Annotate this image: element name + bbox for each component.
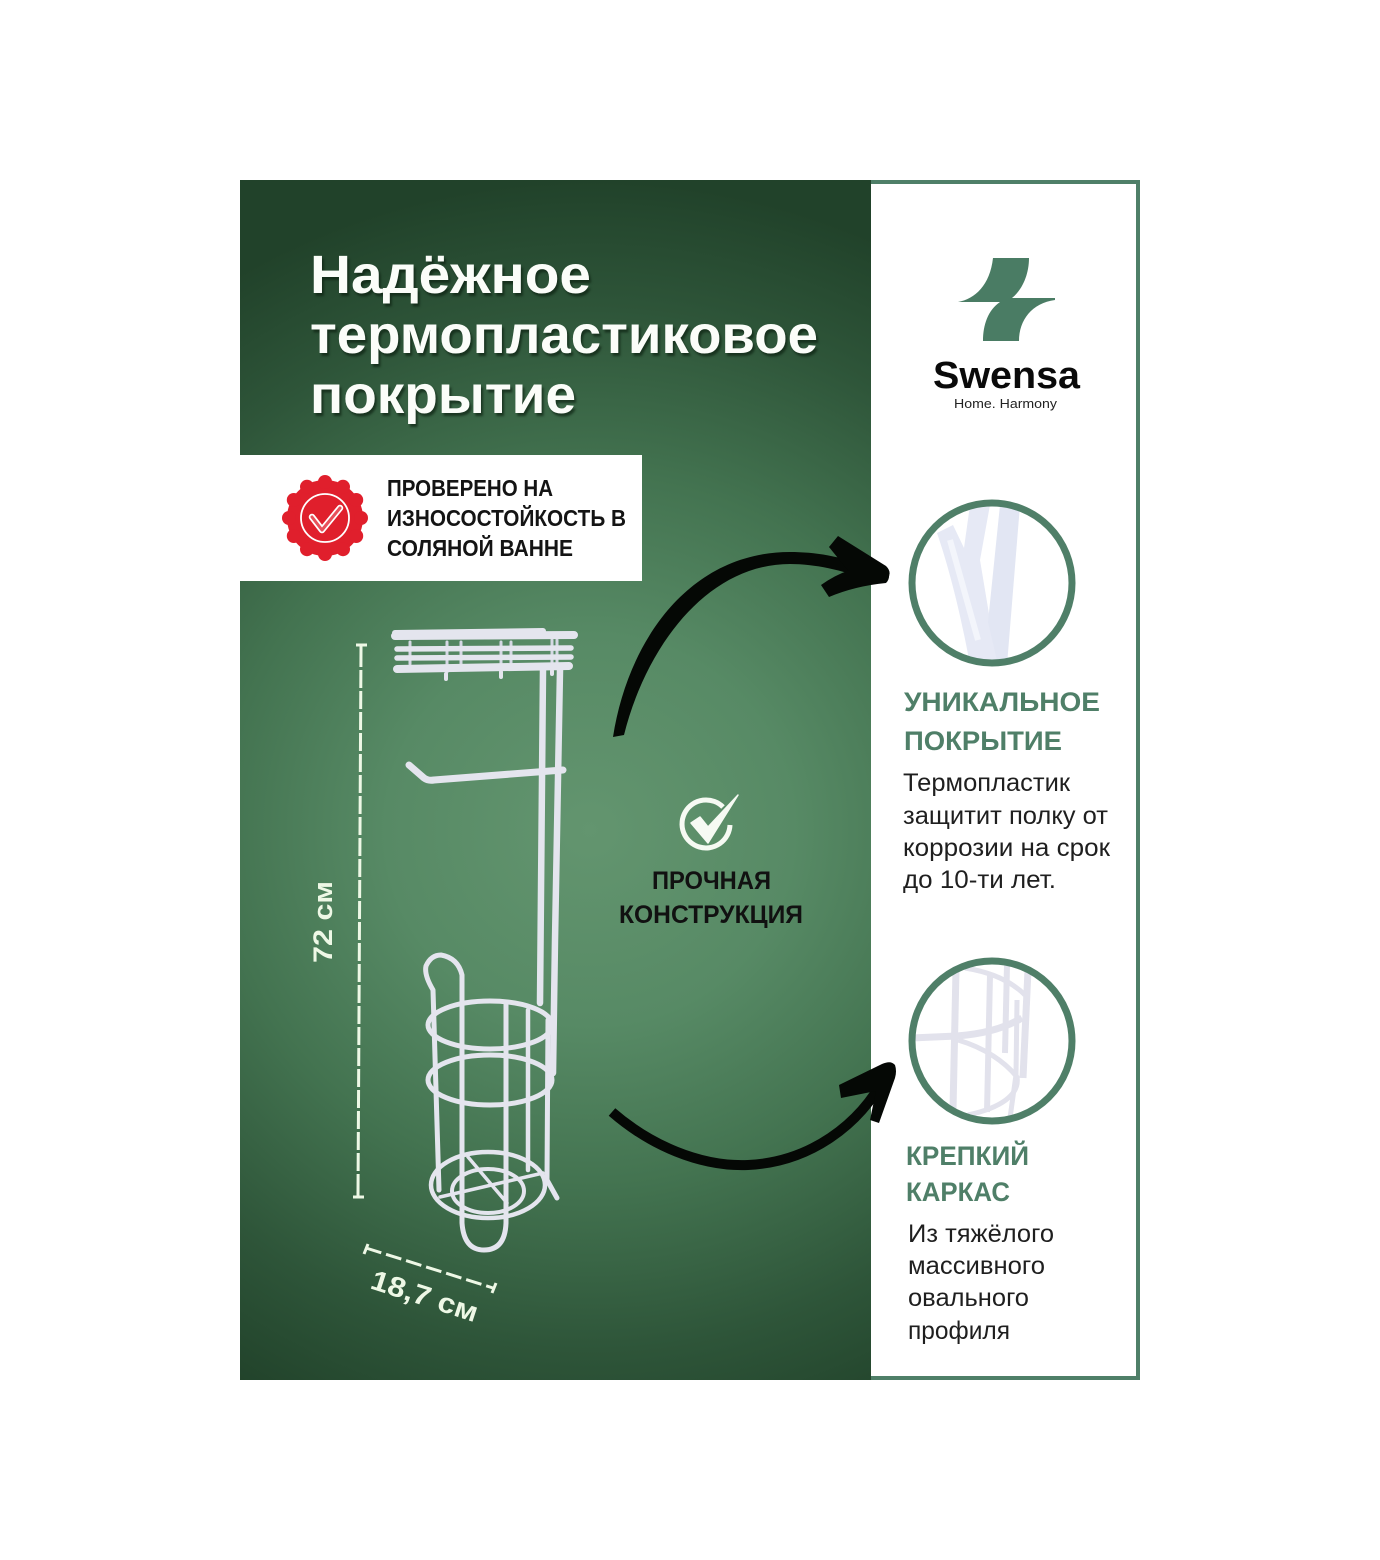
body: коррозии на срок [903, 834, 1111, 862]
icon: red seal with check [282, 475, 368, 561]
paper bar [409, 765, 563, 780]
body: до 10-ти лет. [903, 866, 1056, 894]
body [908, 1220, 1054, 1345]
text: badge label: ПРОВЕРЕНО НА [387, 475, 553, 501]
body: профиля [908, 1317, 1010, 1345]
body: Из тяжёлого [908, 1220, 1054, 1248]
icon: white wire shelf product [395, 631, 574, 1250]
logo: Swensa [933, 258, 1081, 411]
basket [426, 955, 557, 1250]
text: durable construction: ПРОЧНАЯ [652, 867, 771, 895]
icon: check circle [682, 795, 738, 848]
text: badge label [387, 475, 626, 561]
text: strong frame [906, 1140, 1054, 1345]
body: массивного [908, 1252, 1045, 1280]
title: покрытие [310, 365, 576, 425]
shelf [395, 631, 574, 679]
title [310, 245, 818, 425]
icon: frame close-up circle [912, 961, 1072, 1121]
text: badge label: ИЗНОСОСТОЙКОСТЬ В [387, 504, 626, 531]
heading: УНИКАЛЬНОЕ [904, 687, 1100, 717]
text: badge label: СОЛЯНОЙ ВАННЕ [387, 534, 573, 561]
heading: ПОКРЫТИЕ [904, 726, 1062, 756]
text: brand name: Swensa [933, 355, 1081, 397]
title: Надёжное [310, 245, 591, 305]
heading [904, 687, 1100, 756]
icon: coating close-up circle [912, 503, 1072, 665]
posts [540, 670, 543, 1003]
callout: salt bath badge [240, 455, 642, 581]
icon: logo mark [958, 258, 1055, 341]
heading [906, 1140, 1029, 1207]
heading: КАРКАС [906, 1177, 1010, 1207]
label: 18,7 cm: 18,7 см [367, 1264, 482, 1328]
label: 72 cm: 72 см [308, 881, 338, 963]
body: овального [908, 1284, 1029, 1312]
arrow: to top circle [613, 536, 890, 737]
body: защитит полку от [903, 802, 1109, 830]
panel: white sidebar [871, 182, 1138, 1378]
dimension: height [353, 645, 367, 1197]
text: durable construction: КОНСТРУКЦИЯ [619, 901, 803, 929]
text: unique coating [903, 687, 1111, 894]
body [903, 769, 1111, 894]
text: tagline: Home. Harmony [954, 396, 1058, 411]
dimension: width [364, 1244, 496, 1293]
heading: КРЕПКИЙ [906, 1140, 1029, 1171]
body: Термопластик [903, 769, 1071, 797]
text: durable construction [619, 867, 803, 929]
panel: green background [240, 180, 871, 1380]
title: термопластиковое [310, 305, 818, 365]
arrow: to bottom circle [612, 1062, 896, 1165]
